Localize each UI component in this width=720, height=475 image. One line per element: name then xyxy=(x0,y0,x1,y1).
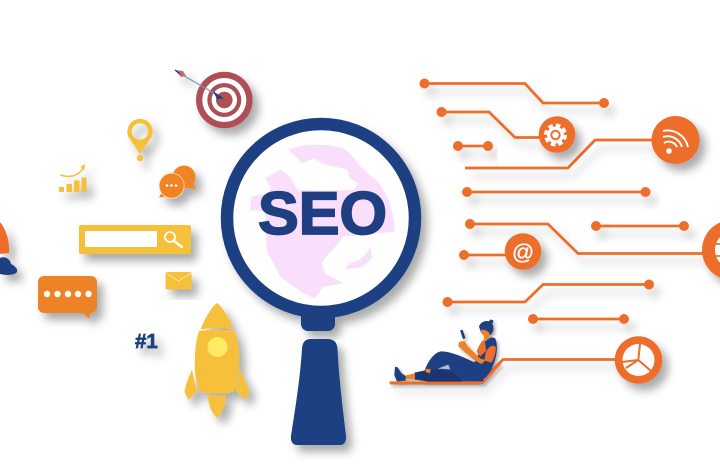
circuit line 3 xyxy=(454,142,492,150)
icon: rising bar chart xyxy=(59,164,86,192)
circuit line 8 xyxy=(460,251,510,259)
circuit line 2 xyxy=(438,108,545,138)
magnifying glass xyxy=(227,124,415,445)
circuit line 6 xyxy=(466,220,710,254)
icon: at sign xyxy=(505,233,541,270)
lens xyxy=(227,124,415,312)
icon: gear xyxy=(539,116,575,153)
circuit lines xyxy=(390,80,710,383)
icon: globe xyxy=(702,220,720,280)
circuit line 7 xyxy=(592,222,688,230)
circuit line 11 xyxy=(390,360,620,383)
icon: pie chart xyxy=(615,336,662,384)
icon: location pin xyxy=(127,119,153,161)
icon: at sign: @ xyxy=(512,240,534,264)
ankle xyxy=(406,369,431,379)
arm xyxy=(458,341,486,364)
neck xyxy=(301,316,335,331)
world map xyxy=(250,145,395,299)
phone xyxy=(460,330,465,339)
hair xyxy=(479,319,494,335)
search bar xyxy=(79,225,191,254)
torso xyxy=(469,337,497,381)
base line xyxy=(390,363,500,383)
face and neck xyxy=(481,329,490,341)
icon: target with arrow xyxy=(175,70,253,128)
SEO heading: SEO xyxy=(258,180,387,247)
shirt xyxy=(477,339,496,363)
shoe back xyxy=(394,367,406,381)
circuit line 5 xyxy=(463,188,649,196)
circuit line 10 xyxy=(529,315,628,323)
icon: chat bubbles xyxy=(159,166,196,198)
ranking label: #1 xyxy=(135,330,158,353)
upper leg xyxy=(424,351,484,381)
handle xyxy=(291,339,346,445)
circuit line 4 xyxy=(465,140,660,168)
icon: wifi xyxy=(652,116,700,164)
icon: envelope xyxy=(166,272,192,290)
person reclining with phone xyxy=(390,319,500,383)
lower leg xyxy=(414,369,462,382)
circuit line 9 xyxy=(444,281,653,306)
knee gap xyxy=(438,365,450,369)
figure cropped at left edge xyxy=(0,222,17,275)
rocket xyxy=(184,303,250,418)
circuit line 1 xyxy=(421,80,608,107)
speech box xyxy=(38,276,97,319)
